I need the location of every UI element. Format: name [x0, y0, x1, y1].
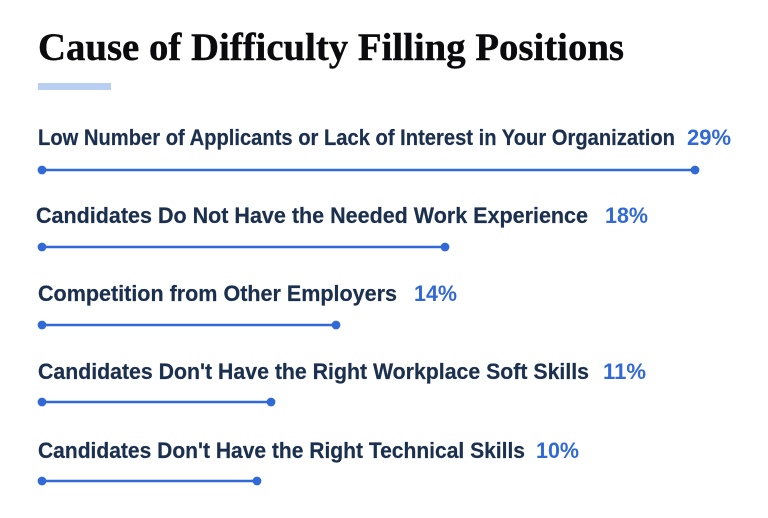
row: workplace soft skills 11%: [38, 359, 646, 406]
row: competition from other employers 14%: 14%: [414, 281, 457, 306]
title accent bar: [38, 83, 111, 90]
row: low number of applicants 29%: Low Number of Applicants or Lack of Interest in Your Organization: [38, 125, 675, 150]
title: Cause of Difficulty Filling Positions: [38, 26, 624, 69]
row: workplace soft skills 11%: Candidates Don't Have the Right Workplace Soft Skills: [38, 359, 589, 384]
row: low number of applicants 29%: 29%: [687, 125, 731, 150]
row: competition from other employers 14%: Competition from Other Employers: [38, 281, 397, 306]
row: workplace soft skills 11%: 11%: [603, 359, 646, 384]
row: needed work experience 18%: 18%: [605, 203, 648, 228]
row: technical skills 10%: [38, 438, 579, 485]
row: needed work experience 18%: Candidates Do Not Have the Needed Work Experience: [36, 203, 588, 228]
row: technical skills 10%: 10%: [536, 438, 579, 463]
row: competition from other employers 14%: [38, 281, 457, 329]
row: low number of applicants 29%: [38, 125, 731, 174]
row: technical skills 10%: Candidates Don't Have the Right Technical Skills: [38, 438, 525, 463]
row: needed work experience 18%: [36, 203, 648, 251]
